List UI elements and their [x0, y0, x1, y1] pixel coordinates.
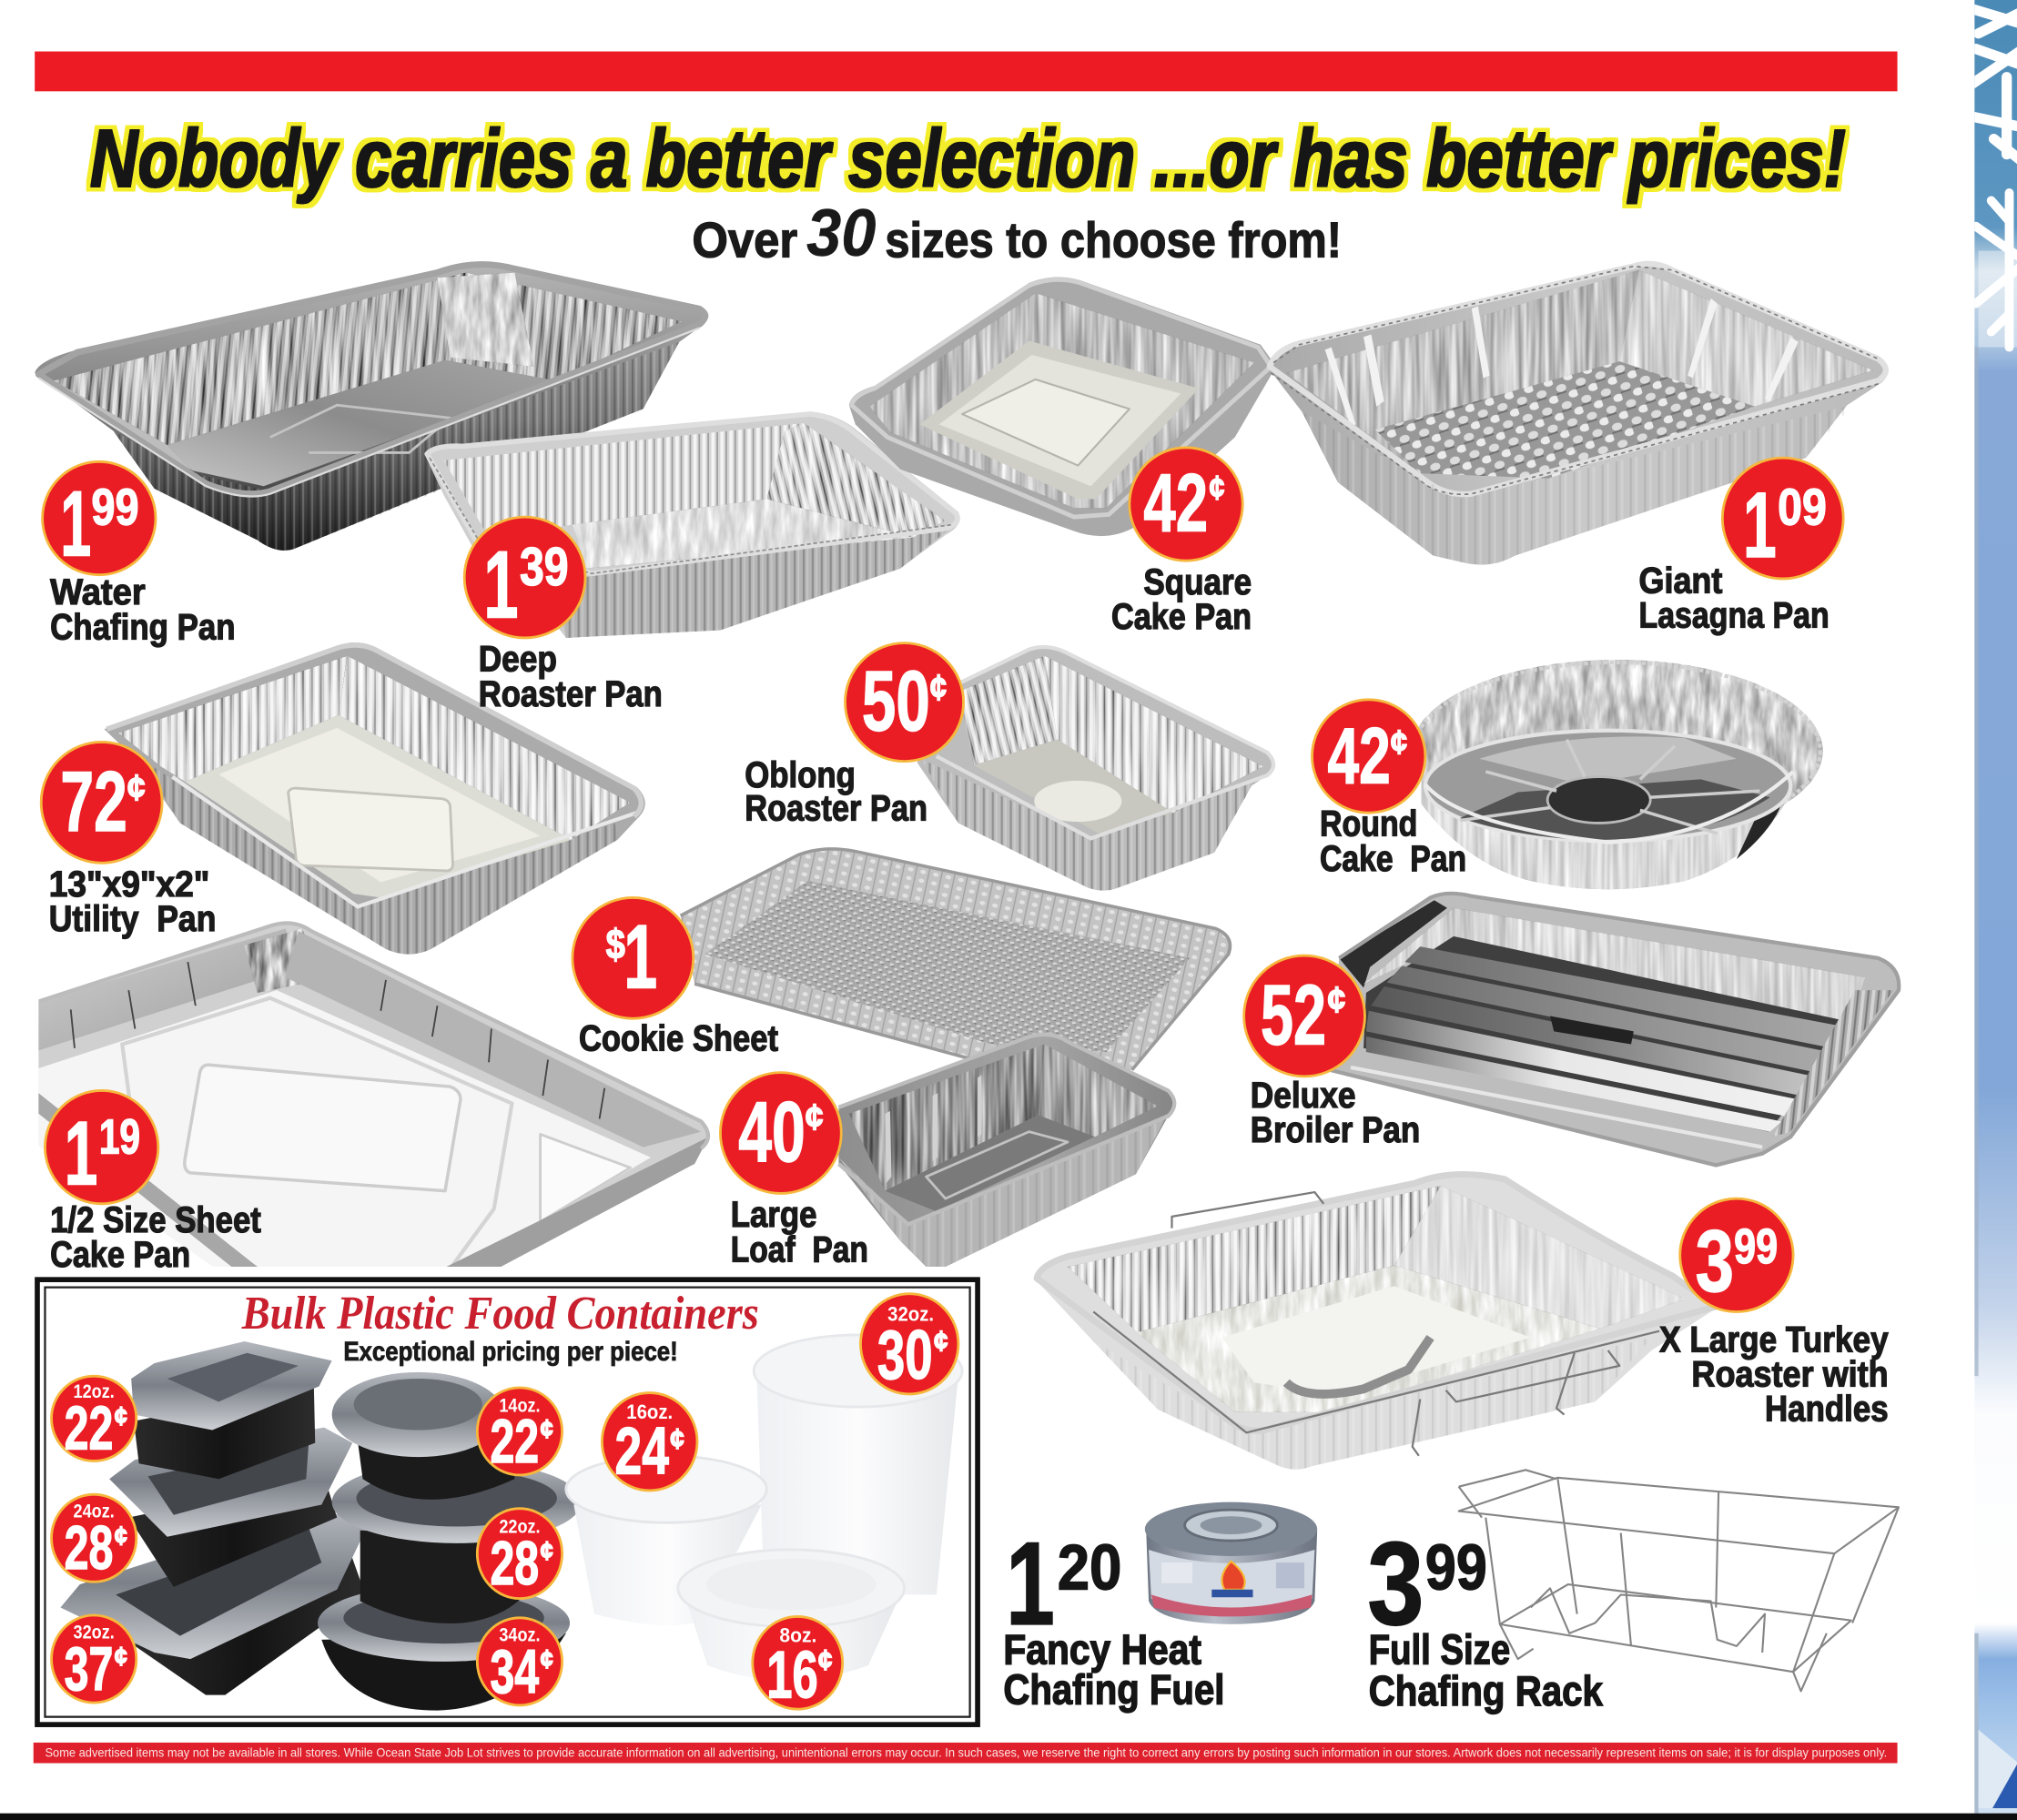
price and label: fancy heat chafing fuel [1003, 1517, 1224, 1714]
side strip: winter snowflake border [1974, 0, 2017, 1814]
label: oblong roaster pan [745, 755, 927, 829]
small badge: 8oz 16c [753, 1616, 843, 1712]
badge: deluxe broiler pan 52c: ¢ [1327, 980, 1345, 1020]
small badge: 34oz 34c: 34 [490, 1638, 539, 1706]
product: square cake pan [849, 277, 1276, 536]
label: large loaf pan: Large [731, 1195, 816, 1235]
label: large loaf pan [731, 1195, 868, 1269]
label: water chafing pan: Chafing Pan [50, 607, 236, 647]
small badge: 8oz 16c: 8oz. [779, 1624, 816, 1647]
badge: deluxe broiler pan 52c: 52 [1261, 968, 1326, 1063]
small badge: 24oz 28c [52, 1494, 137, 1582]
small badge: 14oz 22c: 14oz. [499, 1396, 541, 1417]
small badge: 12oz 22c: 12oz. [74, 1381, 115, 1402]
price and label: full size chafing rack: 3 [1367, 1517, 1424, 1650]
product labels group [49, 561, 1889, 1430]
small badge: 32oz 37c: ¢ [115, 1642, 127, 1671]
small badge: 32oz 37c [52, 1615, 137, 1704]
small badge: 8oz 16c: ¢ [818, 1643, 832, 1675]
small badge: 22oz 28c: ¢ [541, 1536, 553, 1565]
product: utility pan 13x9x2 [104, 642, 645, 955]
badge: cookie sheet $1 [573, 897, 694, 1018]
product: cookie sheet [681, 849, 1230, 1070]
small badge: 12oz 22c: ¢ [115, 1401, 127, 1431]
price and label: full size chafing rack: 99 [1425, 1532, 1487, 1603]
badge: oblong roaster pan 50c: 50 [862, 654, 930, 749]
badge: round cake pan 42c [1313, 700, 1425, 813]
price and label: fancy heat chafing fuel: Chafing Fuel [1003, 1666, 1224, 1714]
small badge: 16oz 24c: ¢ [670, 1422, 684, 1454]
badge: giant lasagna pan 1.09: 09 [1778, 479, 1827, 536]
small badge: 32oz 30c: 32oz. [887, 1302, 934, 1325]
badge: square cake pan 42c [1130, 448, 1242, 561]
price and label: full size chafing rack [1367, 1517, 1603, 1714]
badge: half sheet cake pan 1.19 [45, 1090, 158, 1204]
badge: oblong roaster pan 50c: ¢ [930, 668, 947, 708]
badge: deep roaster pan 1.39 [464, 517, 585, 638]
label: deep roaster pan [479, 640, 663, 714]
label: round cake pan [1320, 804, 1466, 879]
label: half size sheet cake pan [50, 1200, 261, 1275]
small badge: 16oz 24c: 24 [615, 1413, 669, 1489]
small badge: 32oz 37c: 37 [65, 1635, 113, 1704]
label: x large turkey roaster [1659, 1320, 1889, 1430]
label: giant lasagna pan: Lasagna Pan [1638, 596, 1829, 636]
small badge: 22oz 28c: 22oz. [499, 1517, 541, 1538]
label: oblong roaster pan: Oblong [745, 755, 856, 795]
price and label: full size chafing rack: Full Size [1369, 1626, 1510, 1673]
product: fancy heat chafing fuel can [1145, 1502, 1317, 1624]
disclaimer bar [34, 1743, 1898, 1764]
subtitle: sizes to choose from! [885, 212, 1342, 268]
label: cookie sheet: Cookie Sheet [579, 1019, 778, 1059]
white deli containers [566, 1335, 962, 1680]
small badge: 12oz 22c [52, 1376, 137, 1463]
small badge: 22oz 28c [477, 1509, 563, 1599]
label: x large turkey roaster: Handles [1765, 1390, 1889, 1430]
product: giant lasagna pan [1267, 261, 1889, 565]
label: round cake pan: Cake Pan [1320, 839, 1466, 879]
label: giant lasagna pan [1638, 561, 1829, 636]
label: utility pan [49, 864, 216, 939]
badge: water chafing pan 1.99: 99 [91, 479, 139, 536]
label: utility pan: Utility Pan [49, 899, 216, 939]
badge: giant lasagna pan 1.09 [1722, 458, 1843, 579]
product: water chafing pan [35, 261, 708, 551]
small badge: 14oz 22c: ¢ [541, 1414, 553, 1443]
label: x large turkey roaster: X Large Turkey [1659, 1320, 1889, 1360]
small badge: 16oz 24c: 16oz. [626, 1400, 673, 1423]
small badge: 32oz 37c: 32oz. [74, 1622, 115, 1643]
small badge: 8oz 16c: 16 [766, 1636, 818, 1712]
badge: utility pan 72c: ¢ [127, 768, 146, 808]
small badge: 22oz 28c: 28 [490, 1530, 539, 1598]
small badge: 14oz 22c [477, 1388, 563, 1476]
badge: cookie sheet $1: $ [606, 921, 625, 967]
badge: large loaf pan 40c: 40 [738, 1085, 806, 1179]
label: water chafing pan: Water [50, 572, 146, 612]
badge: water chafing pan 1.99: 1 [60, 472, 91, 576]
panel: bulk plastic food containers [37, 1279, 978, 1724]
label: deluxe broiler pan: Broiler Pan [1251, 1110, 1420, 1150]
subtitle: 30 [806, 195, 877, 270]
badge: square cake pan 42c: ¢ [1209, 469, 1224, 506]
label: half size sheet cake pan: Cake Pan [50, 1235, 190, 1275]
badge: round cake pan 42c: ¢ [1391, 723, 1407, 761]
small badge: 16oz 24c [602, 1393, 697, 1491]
product: full size chafing rack [1459, 1470, 1899, 1691]
badge: turkey roaster 3.99: 99 [1734, 1219, 1778, 1274]
product: deep roaster pan [424, 411, 960, 638]
subtitle [692, 195, 1342, 270]
label: large loaf pan: Loaf Pan [731, 1229, 868, 1269]
bottom black edge [0, 1814, 2017, 1820]
badge: utility pan 72c [41, 742, 162, 863]
price and label: fancy heat chafing fuel: Fancy Heat [1003, 1626, 1201, 1673]
price and label: fancy heat chafing fuel: 20 [1058, 1532, 1121, 1603]
badge: giant lasagna pan 1.09: 1 [1743, 473, 1777, 577]
label: square cake pan: Cake Pan [1111, 597, 1252, 637]
small badge: 34oz 34c: 34oz. [499, 1624, 541, 1645]
small badge: 32oz 30c: 30 [877, 1317, 933, 1394]
badge: water chafing pan 1.99 [43, 461, 156, 576]
price and label: fancy heat chafing fuel: 1 [1006, 1517, 1055, 1650]
product: deluxe broiler pan [1330, 894, 1899, 1165]
subheading: exceptional pricing: Exceptional pricing per piece! [343, 1337, 678, 1367]
badge: square cake pan 42c: 42 [1143, 458, 1208, 550]
small badge: 32oz 30c: ¢ [934, 1325, 948, 1357]
small badge: 14oz 22c: 22 [490, 1408, 539, 1476]
badge: deep roaster pan 1.39: 1 [483, 531, 519, 638]
small badge: 12oz 22c: 22 [65, 1395, 113, 1463]
badge: turkey roaster 3.99 [1680, 1198, 1793, 1311]
badge: oblong roaster pan 50c [846, 643, 964, 762]
product: round cake pan [1411, 660, 1823, 889]
small badge: 34oz 34c: ¢ [541, 1644, 553, 1673]
disclaimer bar: Some advertised items may not be available in all stores. While Ocean State Job Lot strives to provide accurate information on all advertising, unintentional errors may occur. In such cases, we reserve the right to correct any errors by posting such information in our stores. Artwork does not necessarily represent items on sale; it is for display purposes only. [45, 1744, 1887, 1759]
round black containers [318, 1372, 582, 1711]
price and label: full size chafing rack: Chafing Rack [1369, 1667, 1603, 1714]
badge: cookie sheet $1: 1 [623, 905, 657, 1006]
badge: round cake pan 42c: 42 [1327, 712, 1391, 801]
small badge: 34oz 34c [477, 1618, 563, 1706]
rectangular black containers [60, 1341, 367, 1695]
label: x large turkey roaster: Roaster with [1691, 1354, 1889, 1394]
label: oblong roaster pan: Roaster Pan [745, 789, 927, 829]
badge: deep roaster pan 1.39: 39 [520, 536, 569, 597]
label: deep roaster pan: Roaster Pan [479, 674, 663, 714]
price badges group [41, 448, 1843, 1311]
small badge: 24oz 28c: 24oz. [74, 1502, 115, 1522]
small badge: 32oz 30c [860, 1294, 958, 1394]
label: giant lasagna pan: Giant [1638, 561, 1722, 601]
product: half size sheet cake pan [25, 923, 709, 1286]
product: x large turkey roaster with handles [1034, 1172, 1718, 1470]
label: utility pan: 13"x9"x2" [49, 864, 209, 905]
label: round cake pan: Round [1320, 804, 1417, 844]
label: half size sheet cake pan: 1/2 Size Sheet [50, 1200, 261, 1240]
badge: large loaf pan 40c [720, 1073, 841, 1193]
product: large loaf pan [838, 1035, 1174, 1273]
badge: utility pan 72c: 72 [60, 754, 127, 849]
label: square cake pan: Square [1143, 562, 1252, 602]
label: deluxe broiler pan [1251, 1076, 1420, 1150]
small badge: 24oz 28c: 28 [65, 1514, 113, 1582]
badge: half sheet cake pan 1.19: 19 [99, 1110, 140, 1165]
top red banner [35, 52, 1898, 91]
product: oblong roaster pan [917, 647, 1273, 891]
badge: turkey roaster 3.99: 3 [1696, 1213, 1734, 1310]
subtitle: Over [692, 212, 797, 268]
small badge: 24oz 28c: ¢ [115, 1521, 127, 1550]
label: deluxe broiler pan: Deluxe [1251, 1076, 1356, 1116]
badge: half sheet cake pan 1.19: 1 [65, 1103, 97, 1204]
label: deep roaster pan: Deep [479, 640, 557, 680]
badge: deluxe broiler pan 52c [1244, 956, 1364, 1077]
label: water chafing pan [50, 572, 236, 647]
badge: large loaf pan 40c: ¢ [806, 1097, 823, 1138]
heading: bulk plastic food containers: Bulk Plastic Food Containers [241, 1287, 759, 1340]
label: square cake pan [1111, 562, 1252, 637]
